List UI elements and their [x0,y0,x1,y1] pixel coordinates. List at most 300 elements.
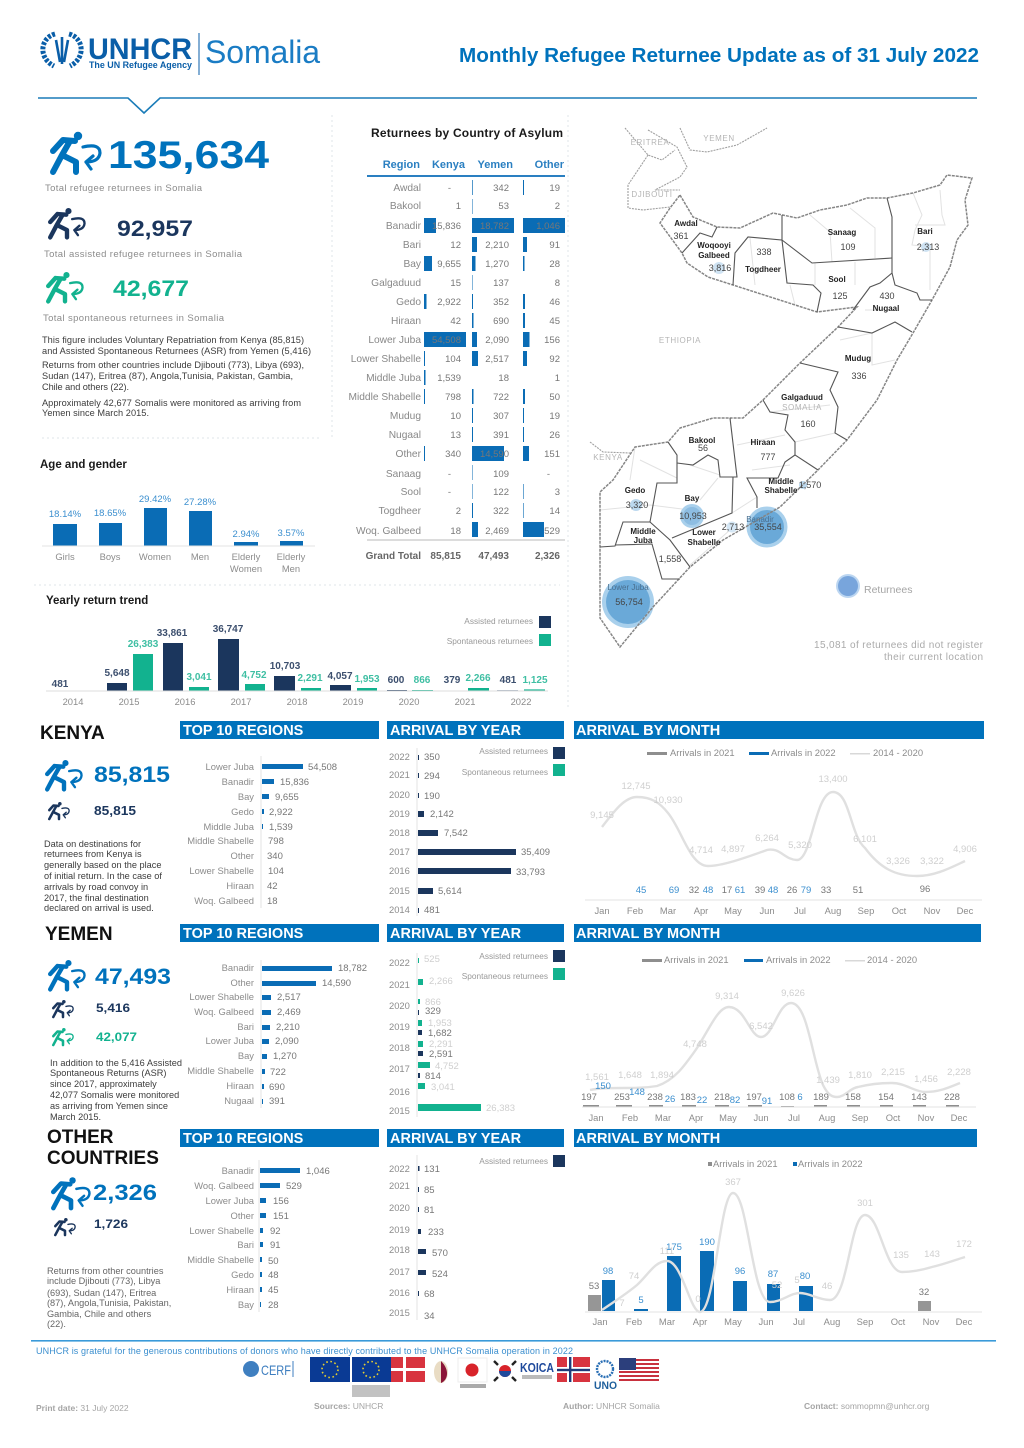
Other column values: - [547,469,550,480]
arrival by month chart: Apr [694,905,708,916]
Kenya column values: 18 [450,526,461,537]
top regions chart [187,960,367,1108]
arrival by month chart: 26 [665,1094,675,1105]
arrival by year chart: 481 [424,905,440,916]
region labels: Galgaduud [781,393,823,402]
heading bars [180,721,984,739]
top regions chart: 1,270 [273,1051,297,1062]
arrival by year chart: 814 [425,1071,441,1082]
top regions chart: Lower Juba [206,761,255,772]
explanatory text: Returns from other countries include Djibouti (773), Libya (693), [42,360,304,370]
year labels: 2014 [63,696,83,707]
assisted: 85,815 [94,804,136,818]
Kenya column values: - [448,469,451,480]
sources: Sources: UNHCR [314,1401,383,1411]
arrival by year chart: Assisted returnees [479,1156,548,1166]
region names: Bari [403,240,421,251]
assisted caption: Total assisted refugee returnees in Somalia [44,249,243,260]
table header [383,159,565,171]
arrival by year chart: 2015 [389,885,410,896]
arrival by month chart: 22 [697,1095,707,1106]
icon: UNHCR laurel emblem [43,34,81,66]
arrival by month chart: 10,930 [653,795,683,806]
assisted labels [52,624,517,690]
top regions chart: Bari [237,1021,254,1032]
arrival by month chart: 6,542 [749,1021,773,1032]
top regions chart: 798 [268,836,284,847]
arrival by year chart: Spontaneous returnees [462,971,548,981]
region labels: Nugaal [873,304,899,313]
arrival by year chart [389,950,565,1117]
arrival by year chart: Assisted returnees [479,746,548,756]
country labels [593,134,822,462]
top regions chart: Woq. Galbeed [194,895,254,906]
region labels [607,219,939,607]
region labels: 1,558 [659,554,681,564]
region labels: Middle [630,527,656,536]
Other column values: 8 [555,278,560,289]
Other column values: 91 [549,240,560,251]
icon: total [50,960,85,989]
assisted labels: 5,648 [104,668,130,679]
note: generally based on the place [44,860,161,870]
region labels: Bay [685,494,700,503]
year labels: 2019 [343,696,363,707]
arrival by month chart: Aug [819,1112,835,1123]
region names: Lower Juba [368,335,421,346]
region labels: Galbeed [698,251,730,260]
categories: Boys [100,551,121,562]
region labels: Juba [634,536,653,545]
header: UNHCR logo and Somalia [43,33,320,75]
arrival by month chart: Feb [622,1112,638,1123]
arrival by year chart: 2018 [389,1244,410,1255]
arrival by month chart: 7 [619,1298,625,1309]
Kenya column values: 15 [450,278,461,289]
arrival by year chart: 1,953 [428,1018,452,1029]
Yemen column values: 53 [498,201,509,212]
arrival by month chart: Jul [794,905,806,916]
arrival by month chart: 301 [857,1198,873,1209]
arrival by year chart: Assisted returnees [479,951,548,961]
region names: Lower Shabelle [351,354,421,365]
arrival by year chart: 34 [424,1311,435,1322]
region labels: 777 [760,452,776,462]
arrival by month chart: 82 [730,1095,740,1106]
arrival by year chart [389,746,565,916]
region labels: Gedo [625,486,645,495]
top regions chart: Hiraan [226,1080,254,1091]
spontaneous caption: Total spontaneous returnees in Somalia [43,313,225,324]
arrival by month chart: 79 [801,885,811,896]
arrival by month chart: 96 [735,1266,745,1277]
arrival by month chart: 32 [919,1287,929,1298]
arrival by year chart: 2022 [389,1163,410,1174]
arrival by month chart: 17 [722,885,732,896]
donor logos [243,1357,659,1397]
region labels: Hiraan [751,438,776,447]
top regions chart: 9,655 [275,792,299,803]
spontaneous labels: 26,383 [128,639,159,650]
arrival by year chart: 2020 [389,1202,410,1213]
arrival by month chart: 87 [768,1269,778,1280]
note: Gambia, Chile and others [47,1309,152,1319]
table bars [424,180,565,537]
arrival by month chart: Jan [588,1112,604,1123]
arrival by month chart: 158 [845,1092,861,1103]
map note [814,640,984,663]
Kenya column values [432,183,461,537]
flag: Norway [557,1357,590,1382]
region names: Banadir [386,221,422,232]
Other column values: 3 [555,487,560,498]
legend: Spontaneous returnees [447,636,533,646]
region names: Mudug [390,411,421,422]
arrival by month chart: Oct [886,1112,901,1123]
arrival by month chart: 1,456 [914,1074,938,1085]
region names: Middle Shabelle [348,392,421,403]
arrival by month chart: Mar [659,1316,675,1327]
arrival by year chart: 2017 [389,846,410,857]
arrival by month chart: 33 [821,885,831,896]
top regions chart: 391 [269,1096,285,1107]
heading: Age and gender [40,459,127,471]
assisted labels: 481 [500,675,517,686]
arrival by year chart: 2021 [389,979,410,990]
top regions chart: Banadir [222,1165,254,1176]
Other column values: 19 [549,411,560,422]
top regions chart: Other [231,977,254,988]
top regions chart: Other [231,1210,254,1221]
region names: Middle Juba [366,373,421,384]
grand total row: 85,815 [430,551,461,562]
arrival by year chart: 1,682 [428,1028,452,1039]
returnee bubbles [602,242,931,628]
assisted number: 92,957 [117,216,193,241]
panel: somalia map [590,128,984,663]
arrival by year chart: 2022 [389,957,410,968]
arrival by month chart: 5,320 [788,840,812,851]
top regions chart: 18,782 [338,963,367,974]
spontaneous labels: 1,125 [522,675,548,686]
top regions chart: 14,590 [322,978,351,989]
author: Author: UNHCR Somalia [563,1401,660,1411]
arrival by year chart: 866 [425,997,441,1008]
map legend: Returnees [864,584,912,596]
spontaneous labels: 2,266 [465,673,491,684]
country labels: KENYA [593,453,623,462]
arrival by month chart: 9,145 [590,810,614,821]
arrival by month chart: Sep [857,1316,873,1327]
country labels: ETHIOPIA [659,336,701,345]
Other column values: 2 [555,201,560,212]
arrival by month chart: 172 [956,1239,972,1250]
note: declared on arrival is used. [44,903,154,913]
arrival by year chart: 26,383 [486,1103,515,1114]
top regions chart: Lower Shabelle [189,991,254,1002]
arrival by year chart: 2016 [389,1086,410,1097]
top regions chart [187,1160,330,1312]
logo: KOICA: KOICA [520,1360,554,1375]
panel: headline totals [42,132,311,418]
Other column values: 50 [549,392,560,403]
arrival by month chart: 1,810 [848,1070,872,1081]
donor acknowledgement: UNHCR is grateful for the generous contributions of donors who have directly contributed to the UNHCR Somalia operation in 2022 [36,1346,573,1356]
region names: Bakool [390,201,421,212]
arrival by month chart: 6,264 [755,833,779,844]
arrival by month chart: Jul [793,1316,805,1327]
arrival by month chart: Arrivals in 2021 [713,1158,778,1169]
region labels: 56 [698,443,708,453]
country name: KENYA [40,723,105,744]
arrival by month chart: 150 [595,1081,611,1092]
Kenya column values: - [448,487,451,498]
arrival by month chart: 45 [636,885,646,896]
categories: Elderly [232,551,261,562]
icon: total returnees [53,132,100,172]
region names: Hiraan [391,316,421,327]
arrival by month chart: Dec [951,1112,968,1123]
Kenya column values: 1,539 [437,373,461,384]
percentages: 29.42% [139,494,172,505]
Kenya column values: 798 [445,392,461,403]
region labels: Shabelle [765,486,798,495]
country labels: YEMEN [703,134,735,143]
Other column values: 151 [544,449,560,460]
note: 42,077 Somalis were monitored [50,1090,179,1100]
arrival by month chart: Nov [924,905,941,916]
arrival by month chart: Arrivals in 2022 [766,954,831,965]
arrival by month chart: Arrivals in 2022 [771,747,836,758]
Other column values: 92 [549,354,560,365]
top regions chart: Middle Shabelle [187,1254,254,1265]
top regions chart: Gedo [231,806,254,817]
arrival by month chart: 46 [822,1281,832,1292]
top regions chart: 104 [268,866,284,877]
note [47,1266,171,1329]
arrival by month chart: 4,906 [953,844,977,855]
arrival by month chart: 98 [603,1266,613,1277]
logo wordmark: UNHCR [88,33,192,66]
total returnees number: 135,634 [108,134,269,177]
region labels: 160 [800,419,816,429]
explanatory text: Chile and others (22). [42,382,129,392]
arrival by month chart: 2014 - 2020 [873,747,923,758]
arrival by year chart: 525 [424,954,440,965]
top regions chart: 15,836 [280,777,309,788]
arrival by year chart: 2021 [389,1180,410,1191]
top regions chart: Middle Juba [203,821,255,832]
arrival by month chart: 3,322 [920,856,944,867]
region labels: Lower Juba [607,583,649,592]
arrival by month chart: Arrivals in 2022 [798,1158,863,1169]
logo wordmark: The UN Refugee Agency [89,60,192,70]
note: 2017, the final destination [44,893,149,903]
flag: Denmark [391,1357,425,1382]
arrival by year chart: 190 [424,791,440,802]
region names: Togdheer [379,506,422,517]
Yemen column values: 122 [493,487,509,498]
region labels: Sool [828,275,846,284]
top regions chart: 690 [269,1082,285,1093]
assisted labels: 10,703 [270,661,301,672]
note: as arriving from Yemen since [50,1101,168,1111]
legend: Assisted returnees [464,616,533,626]
arrival by month chart: 52 [772,1280,782,1291]
region labels: 1,570 [799,480,821,490]
year labels: 2018 [287,696,307,707]
Yemen column values: 307 [493,411,509,422]
Yemen column values: 18 [498,373,509,384]
country name [47,1127,159,1169]
arrival by month chart: 9,314 [715,991,739,1002]
title: Monthly Refugee Returnee Update as of 31 July 2022 [459,44,979,67]
year labels: 2016 [175,696,195,707]
arrival by month chart: Sep [852,1112,868,1123]
arrival by month chart: 80 [800,1271,810,1282]
Yemen column values [480,183,509,537]
logo: CERF: CERF [261,1362,291,1378]
heading bars: ARRIVAL BY MONTH [576,1131,720,1147]
arrival by month chart: Jul [788,1112,800,1123]
total returnees caption: Total refugee returnees in Somalia [45,183,203,194]
table title: Returnees by Country of Asylum [371,126,563,140]
arrival by year chart: 2018 [389,827,410,838]
heading bars: TOP 10 REGIONS [183,1131,304,1147]
arrival by year chart: 2015 [389,1105,410,1116]
Other column values: 28 [549,259,560,270]
table header: Yemen [478,159,513,171]
arrival by month chart: 5 [638,1295,644,1306]
arrival by month chart: 4,714 [689,845,713,856]
arrival by year chart: 85 [424,1185,435,1196]
assisted labels: 379 [444,675,461,686]
assisted labels: 36,747 [213,624,244,635]
Kenya column values: 2 [456,506,461,517]
region names: Nugaal [389,430,421,441]
panel: returnees by country of asylum table [348,126,565,562]
flag: USA [619,1358,659,1382]
region labels: Awdal [674,219,698,228]
year labels: 2020 [399,696,419,707]
arrival by month chart: 6,101 [853,834,877,845]
region labels: 361 [673,231,689,241]
region labels: 430 [879,291,895,301]
top regions chart: 529 [286,1181,302,1192]
top regions chart [187,756,337,908]
arrival by month chart [585,747,982,916]
top regions chart: 45 [268,1285,279,1296]
region labels: Mudug [845,354,871,363]
arrival by month chart: Mar [660,905,676,916]
arrival by month chart: 51 [853,885,863,896]
arrival by month chart: 61 [735,885,745,896]
arrival by month chart: Nov [918,1112,935,1123]
top regions chart: 50 [268,1256,279,1267]
percentages: 3.57% [278,528,305,539]
Other column values: 156 [544,335,560,346]
arrival by month chart: 74 [629,1271,639,1282]
arrival by month chart: 0 [695,1294,701,1305]
arrival by year chart: 350 [424,752,440,763]
top regions chart: 722 [270,1067,286,1078]
arrival by month chart: 13,400 [818,774,848,785]
region labels: 2,713 [722,522,744,532]
region labels: 56,754 [615,597,643,607]
icon: spontaneous returnees [48,272,83,301]
spontaneous labels [128,639,548,686]
arrival by month chart: 218 [714,1092,730,1103]
arrival by year chart: 2021 [389,769,410,780]
top regions chart: Bay [238,1299,254,1310]
arrival by month chart: 2,228 [947,1067,971,1078]
arrival by month chart: Dec [956,1316,973,1327]
note: since 2017, approximately [50,1079,157,1089]
arrival by year chart: 2020 [389,789,410,800]
Yemen column values: 690 [493,316,509,327]
section: Other countries [47,1127,982,1329]
note: March 2015. [50,1112,101,1122]
top regions chart: Lower Juba [206,1035,255,1046]
percentages: 2.94% [233,529,260,540]
Kenya column values: 42 [450,316,461,327]
Yemen column values: 109 [493,469,509,480]
top regions chart: Other [231,850,254,861]
arrival by month chart: 48 [768,885,778,896]
heading: Yearly return trend [46,595,148,607]
arrival by month chart: 143 [911,1092,927,1103]
region labels: 338 [756,247,772,257]
map note: 15,081 of returnees did not register [814,640,984,651]
explanatory text: This figure includes Voluntary Repatriation from Kenya (85,815) [42,335,304,345]
top regions chart: Bay [238,1050,254,1061]
Other column values: 1 [555,373,560,384]
top regions chart: 151 [273,1211,289,1222]
assisted labels: 33,861 [157,628,188,639]
top regions chart: Bari [237,1239,254,1250]
percentages: 18.65% [94,508,127,519]
percentages: 18.14% [49,509,82,520]
heading bars [180,924,981,942]
note: Spontaneous Returns (ASR) [50,1068,166,1078]
Kenya column values: - [448,183,451,194]
categories: Women [139,551,171,562]
arrival by month chart: 4,897 [721,844,745,855]
top regions chart: Bay [238,791,254,802]
top regions chart: 48 [268,1270,279,1281]
region names: Sanaag [386,469,421,480]
top regions chart: 18 [267,896,278,907]
Yemen column values: 137 [493,278,509,289]
heading bars: ARRIVAL BY MONTH [576,926,720,942]
arrival by month chart: 135 [893,1250,909,1261]
arrival by year chart: 2019 [389,1224,410,1235]
heading bars [180,1129,977,1147]
year labels: 2015 [119,696,139,707]
arrival by year chart: 2020 [389,1000,410,1011]
arrival by month chart: 108 [779,1092,795,1103]
categories [55,551,306,574]
top regions chart: 2,469 [277,1007,301,1018]
table header: Other [535,159,565,171]
top regions chart: 54,508 [308,762,337,773]
arrival by year chart: 7,542 [444,828,468,839]
region labels: 3,816 [709,263,731,273]
Kenya column values: 104 [445,354,461,365]
explanatory text: Approximately 42,677 Somalis were monitored as arriving from [42,398,301,408]
explanatory text: Sudan (147), Eritrea (87), Angola,Tunisia, Pakistan, Gambia, [42,371,293,381]
Kenya column values: 13 [450,430,461,441]
